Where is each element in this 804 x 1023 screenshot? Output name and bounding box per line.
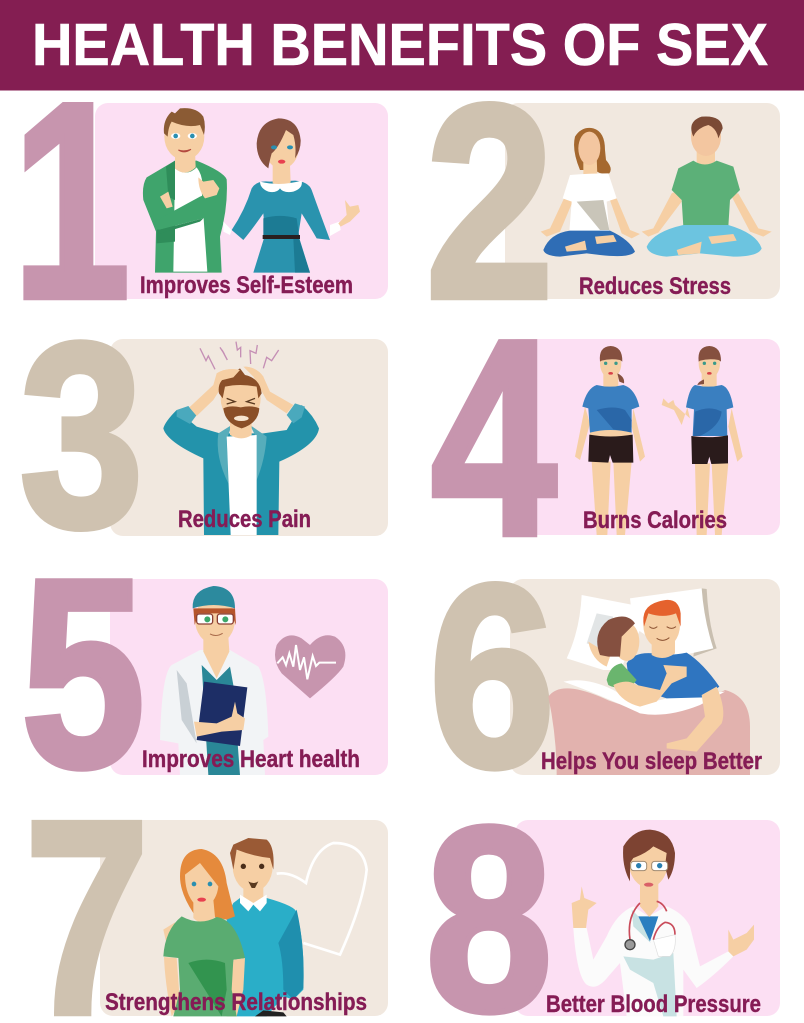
illustration: couple embracing with heart outline <box>163 838 367 1016</box>
illustration: couple sleeping in bed <box>548 588 750 775</box>
panel 2: reduces stress <box>426 48 780 356</box>
panel 3: reduces pain <box>20 288 388 582</box>
illustration: male doctor with clipboard <box>160 586 345 775</box>
illustration: confident man and woman <box>143 108 360 273</box>
numeral 1: 1 <box>12 46 130 357</box>
panel 7: strengthens relationships <box>24 764 388 1023</box>
title banner <box>0 0 804 90</box>
illustration: man in pain holding head <box>163 342 319 535</box>
illustration: two people meditating <box>541 116 772 257</box>
numeral 6: 6 <box>429 530 555 821</box>
numeral 2: 2 <box>426 48 554 356</box>
label: Strengthens Relationships <box>105 989 367 1016</box>
panel 6: helps you sleep better <box>429 530 780 821</box>
panel 8: better blood pressure <box>426 773 780 1023</box>
numeral 5: 5 <box>21 525 145 824</box>
numeral 4: 4 <box>431 281 557 593</box>
icon: heart with pulse line <box>275 635 345 698</box>
panel 5: improves heart health <box>21 525 388 824</box>
label: Better Blood Pressure <box>546 991 761 1018</box>
label: Improves Heart health <box>142 746 360 773</box>
panel 4: burns calories <box>431 281 780 593</box>
numeral 3: 3 <box>20 288 144 582</box>
illustration: female doctor with stethoscope <box>572 830 754 1016</box>
label: Helps You sleep Better <box>541 748 762 775</box>
panel 1: improves self-esteem <box>12 46 388 357</box>
illustration: woman before and after weight loss <box>575 346 743 535</box>
label: Reduces Stress <box>579 273 731 300</box>
label: Improves Self-Esteem <box>140 272 353 299</box>
label: Burns Calories <box>583 507 727 534</box>
label: Reduces Pain <box>178 506 311 533</box>
title: HEALTH BENEFITS OF SEX <box>32 12 768 78</box>
